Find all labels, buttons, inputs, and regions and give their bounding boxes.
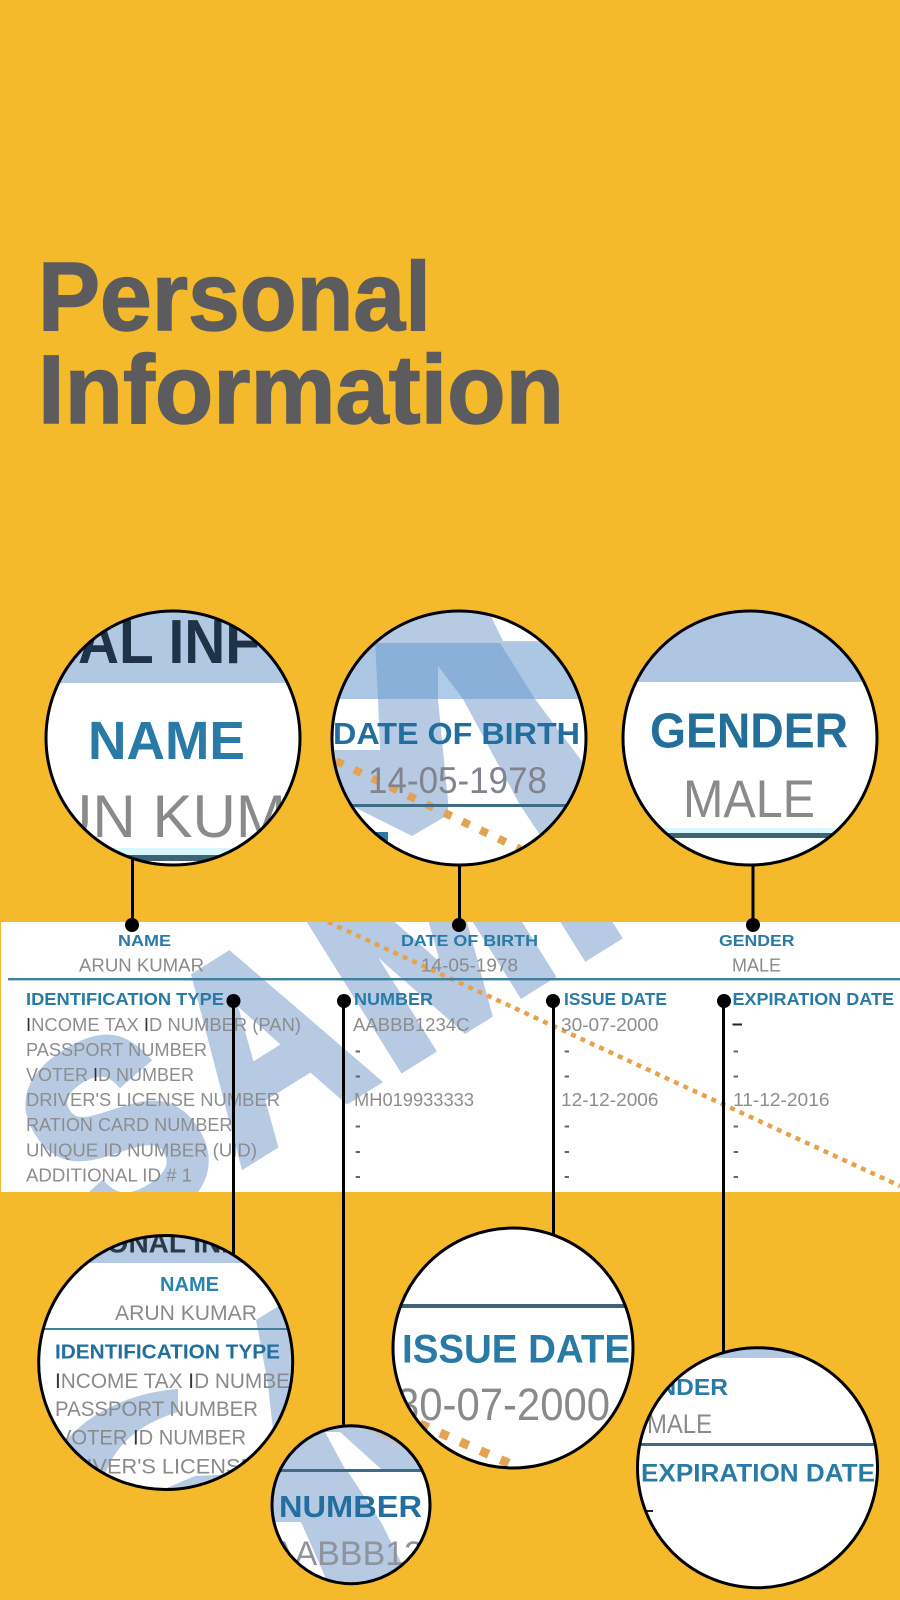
table rows and headers: - [355,1116,361,1135]
magnifier: name: AL INF [78,608,260,677]
table rows and headers: NUMBER [354,989,433,1009]
connector: issue date [546,994,560,1236]
table rows and headers: AABBB1234C [353,1015,470,1035]
magnifier: expiration date [623,1345,880,1588]
table rows and headers: 11-12-2016 [733,1090,830,1110]
table rows and headers: RATION CARD NUMBER [26,1115,232,1135]
table rows and headers: - [355,1166,361,1186]
table rows and headers: - [733,1041,739,1060]
table rows and headers: VOTER ID NUMBER [26,1065,194,1085]
magnifier: identification type: PASSPORT NUMBER [55,1398,258,1421]
magnifier: identification type: ARUN KUMAR [115,1302,257,1325]
table rows and headers: - [733,1066,739,1085]
magnifier: name: NAME [88,711,245,771]
watermark: SAMPLE: A [113,875,410,1213]
table rows and headers: MALE [732,956,781,976]
magnifier: expiration date: MALE [647,1409,712,1439]
magnifier: issue date [390,1228,640,1468]
table rows and headers: - [355,1142,361,1160]
table rows and headers: - [733,1116,739,1135]
panel: sample ID record table [1,922,900,1192]
magnifier: expiration date: EXPIRATION DATE [641,1460,875,1488]
table rows and headers: - [564,1066,570,1085]
table rows and headers: NAME [118,933,171,950]
magnifier: gender [620,608,880,865]
table rows and headers: 14-05-1978 [421,956,518,976]
connector: gender [746,855,760,932]
magnifier: gender: GENDER [650,704,848,758]
watermark: SAMPLE [25,922,900,1192]
table rows and headers: - [355,1041,361,1060]
table rows and headers: - [564,1116,570,1135]
table rows and headers: - [733,1166,739,1186]
magnifier: date of birth [330,608,590,865]
connector: date of birth [452,855,466,932]
table rows and headers: MH019933333 [354,1090,474,1110]
table rows and headers: GENDER [719,933,795,950]
connector: name [125,855,139,932]
magnifier: name [44,610,302,866]
magnifier: issue date: 30-07-2000 [396,1379,610,1430]
table rows and headers: PASSPORT NUMBER [26,1040,207,1060]
table rows and headers [8,933,900,1186]
table rows and headers: ISSUE DATE [564,989,667,1009]
table rows and headers: ADDITIONAL ID # 1 [26,1166,192,1186]
watermark: SAMPLE: M [262,763,593,1123]
title: Personal [38,242,431,351]
table rows and headers: 12-12-2006 [561,1090,658,1110]
table rows and headers: INCOME TAX ID NUMBER (PAN) [26,1015,301,1035]
table rows and headers: DATE OF BIRTH [401,933,538,950]
title: Information [38,335,564,444]
table rows and headers: - [564,1041,570,1060]
magnifier: gender: MALE [683,770,815,829]
table rows and headers: DRIVER'S LICENSE NUMBER [26,1090,280,1110]
magnifier: name: UN KUMA [49,783,326,850]
title [38,242,564,444]
table rows and headers: - [564,1142,570,1160]
magnifier: date of birth: DATE OF BIRTH [333,716,580,751]
magnifier: number: AABBB12 [272,1535,423,1573]
table rows and headers: EXPIRATION DATE [732,989,894,1009]
magnifier: issue date: ISSUE DATE [402,1328,630,1372]
connector: expiration date [717,994,731,1352]
table rows and headers: - [564,1166,570,1186]
magnifier: identification type: VOTER ID NUMBER [58,1426,246,1450]
magnifier: identification type [35,1228,298,1495]
connector: number [337,994,351,1430]
magnifier: number: NUMBER [279,1489,422,1524]
magnifier: identification type: SONAL INF [88,1228,238,1258]
connector: identification type [226,994,240,1265]
table rows and headers: - [355,1066,361,1085]
magnifier: expiration date: GENDER [623,1374,728,1400]
magnifier: date of birth: 14-05-1978 [368,760,547,801]
magnifier: identification type: IDENTIFICATION TYPE [55,1340,280,1364]
table rows and headers: - [733,1142,739,1160]
magnifier: identification type: INCOME TAX ID NUMBE [55,1370,290,1393]
table rows and headers: 30-07-2000 [561,1015,658,1035]
magnifier: identification type: DRIVER'S LICENSE [55,1456,255,1478]
table rows and headers: UNIQUE ID NUMBER (UID) [26,1140,257,1160]
magnifier: identification type: NAME [160,1274,219,1296]
table rows and headers: ARUN KUMAR [79,956,204,976]
table rows and headers: IDENTIFICATION TYPE [26,989,224,1009]
magnifier: number [268,1426,435,1590]
